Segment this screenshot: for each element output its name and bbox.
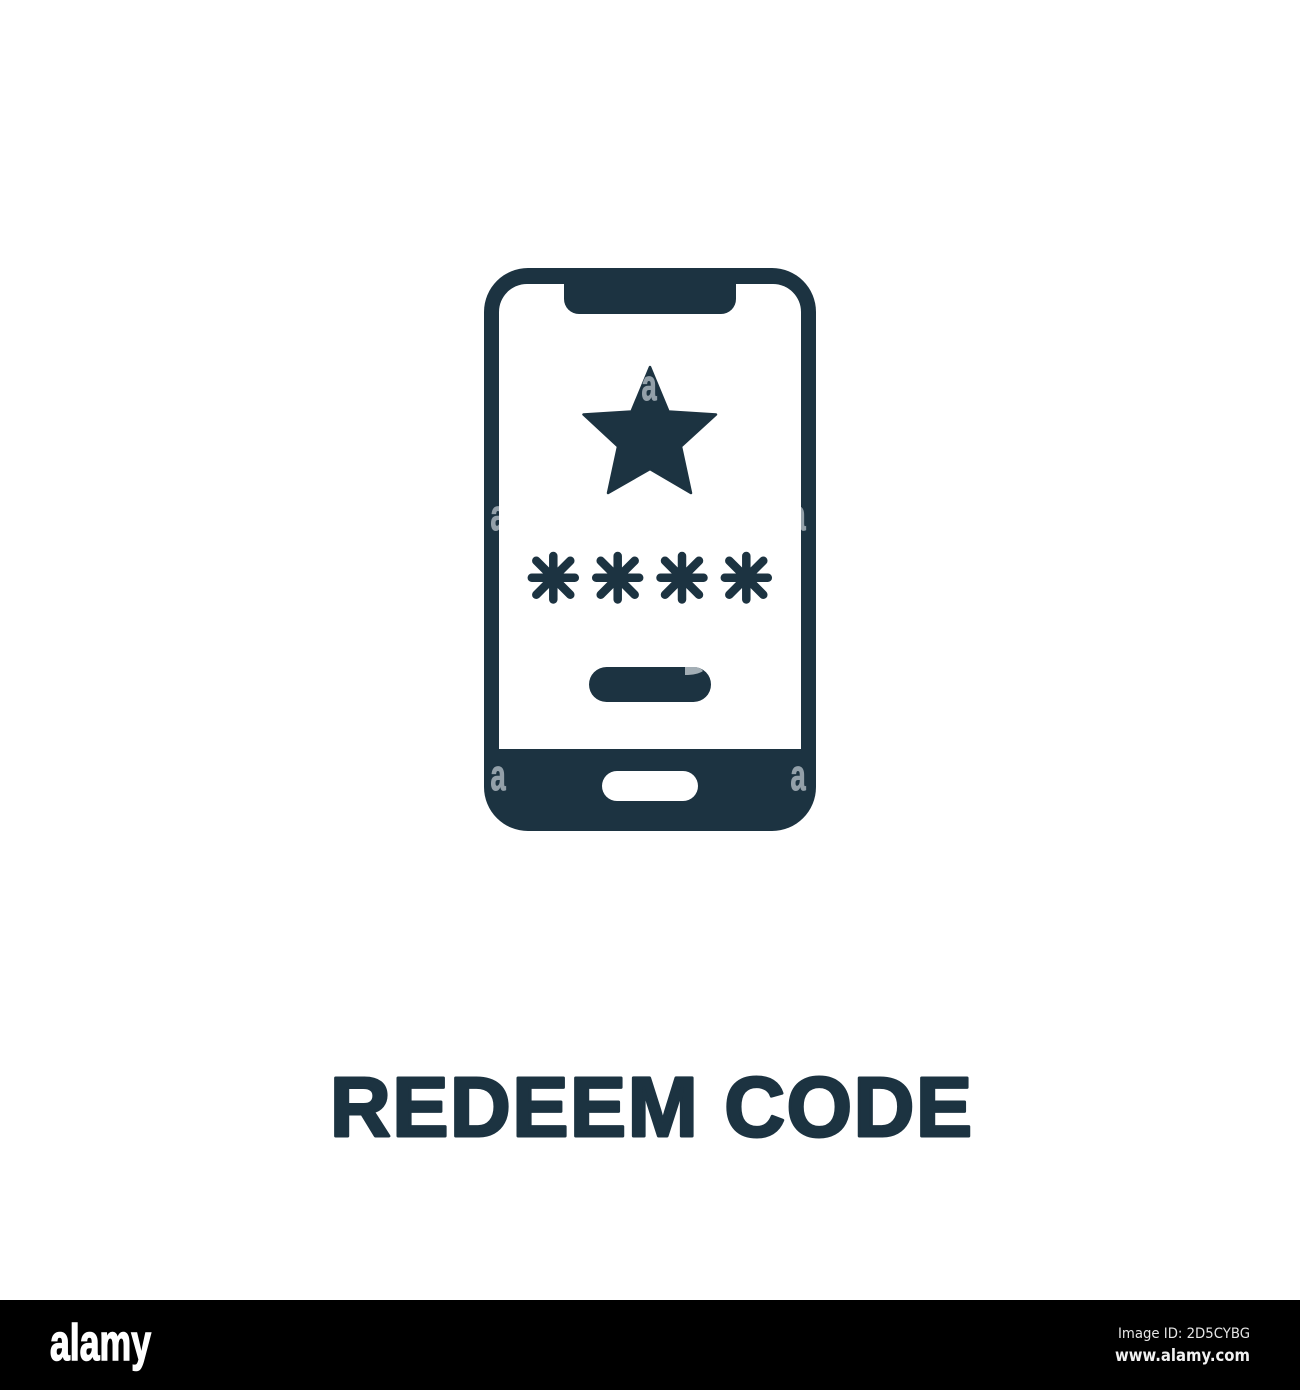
icon: smartphone with redeem code screen <box>484 268 816 831</box>
watermark: star: a <box>642 360 657 410</box>
phone body <box>484 268 816 831</box>
footer bar <box>0 1300 1300 1390</box>
phone screen <box>499 284 801 749</box>
website: www.alamy.com <box>1115 1346 1250 1365</box>
watermark: right edge: a <box>790 490 806 540</box>
watermark: lower left: a <box>490 750 506 800</box>
icon: star <box>584 367 716 493</box>
watermark: left edge: a <box>490 490 506 540</box>
watermark marks on the phone <box>490 360 806 800</box>
footer background <box>0 1300 1300 1390</box>
footer logo: alamy <box>50 1314 151 1371</box>
watermark: button fleck <box>685 667 703 675</box>
icon: four asterisks <box>532 556 768 600</box>
phone notch <box>564 284 736 314</box>
home button <box>602 771 698 801</box>
image id: Image ID: 2D5CYBG <box>1118 1326 1250 1342</box>
submit button <box>589 667 711 702</box>
title: REDEEM CODE <box>330 1060 972 1154</box>
watermark: lower right: a <box>790 750 806 800</box>
